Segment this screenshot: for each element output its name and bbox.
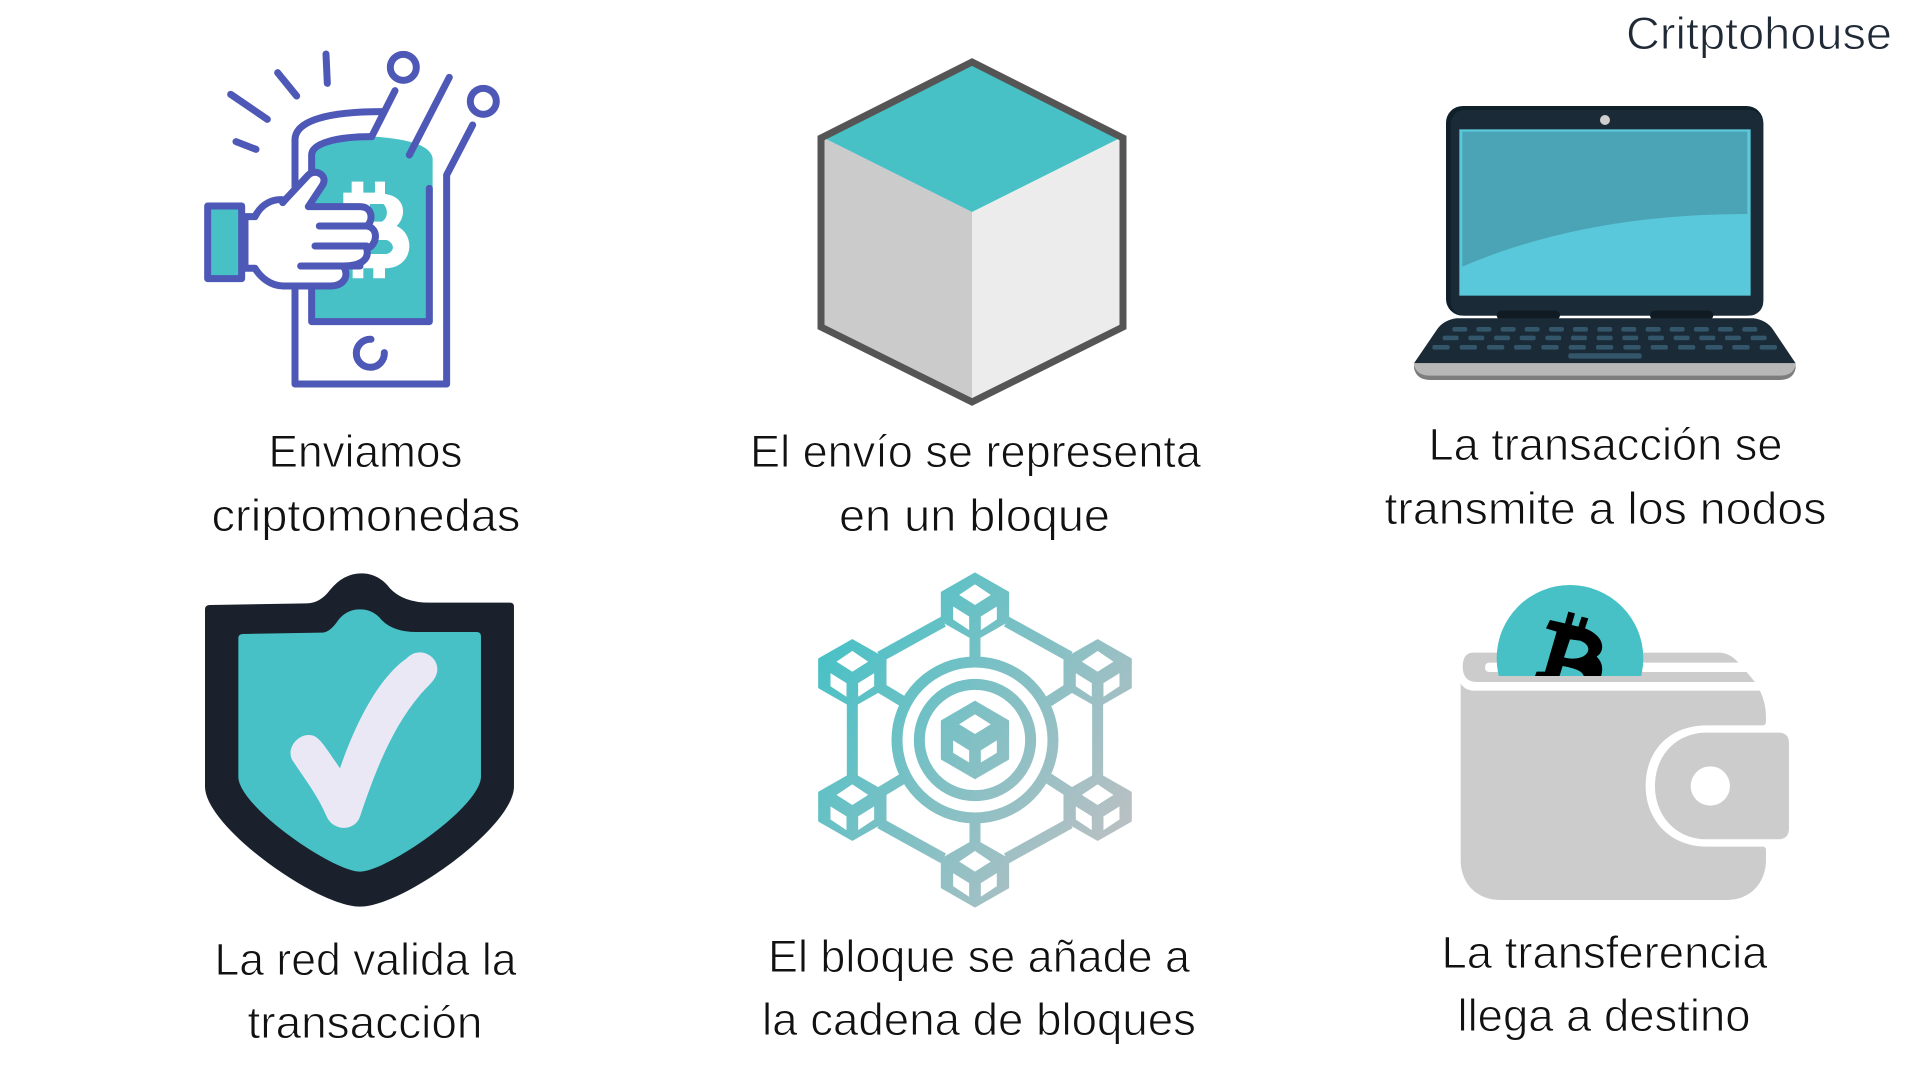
caption: step 4	[214, 934, 517, 1048]
caption: step 5: la cadena de bloques	[762, 994, 1196, 1045]
caption: step 5	[762, 931, 1196, 1045]
icon: shield with check mark	[205, 573, 514, 907]
panel: step 5 blockchain	[762, 573, 1196, 1045]
panel: step 4 validation	[205, 573, 517, 1048]
icon: hand tapping phone with bitcoin	[208, 54, 496, 384]
panel: step 2 block	[750, 62, 1202, 541]
icon: wallet with bitcoin coin	[1461, 585, 1789, 900]
icon: blockchain network	[819, 573, 1131, 907]
caption: step 1: criptomonedas	[212, 490, 520, 541]
caption: step 5: El bloque se añade a	[768, 931, 1191, 982]
caption: step 2: El envío se representa	[750, 426, 1202, 477]
caption: step 2	[750, 426, 1202, 541]
caption: step 3: transmite a los nodos	[1384, 483, 1826, 534]
panel: step 1 send cryptocurrency	[208, 54, 521, 541]
caption: step 3: La transacción se	[1428, 419, 1782, 470]
caption: step 1	[212, 426, 520, 541]
caption: step 6: La transferencia	[1442, 927, 1768, 978]
caption: step 4: transacción	[248, 997, 482, 1048]
caption: step 6: llega a destino	[1458, 990, 1750, 1041]
caption: step 3	[1384, 419, 1826, 534]
panel: step 6 destination	[1442, 585, 1789, 1041]
caption: step 6	[1442, 927, 1768, 1041]
caption: step 2: en un bloque	[839, 490, 1110, 541]
icon: isometric block	[821, 62, 1123, 402]
panel: step 3 nodes	[1384, 106, 1826, 534]
icon: laptop	[1414, 106, 1796, 380]
caption: step 4: La red valida la	[214, 934, 517, 985]
brand name: Critptohouse	[1626, 8, 1892, 59]
caption: step 1: Enviamos	[268, 426, 462, 477]
